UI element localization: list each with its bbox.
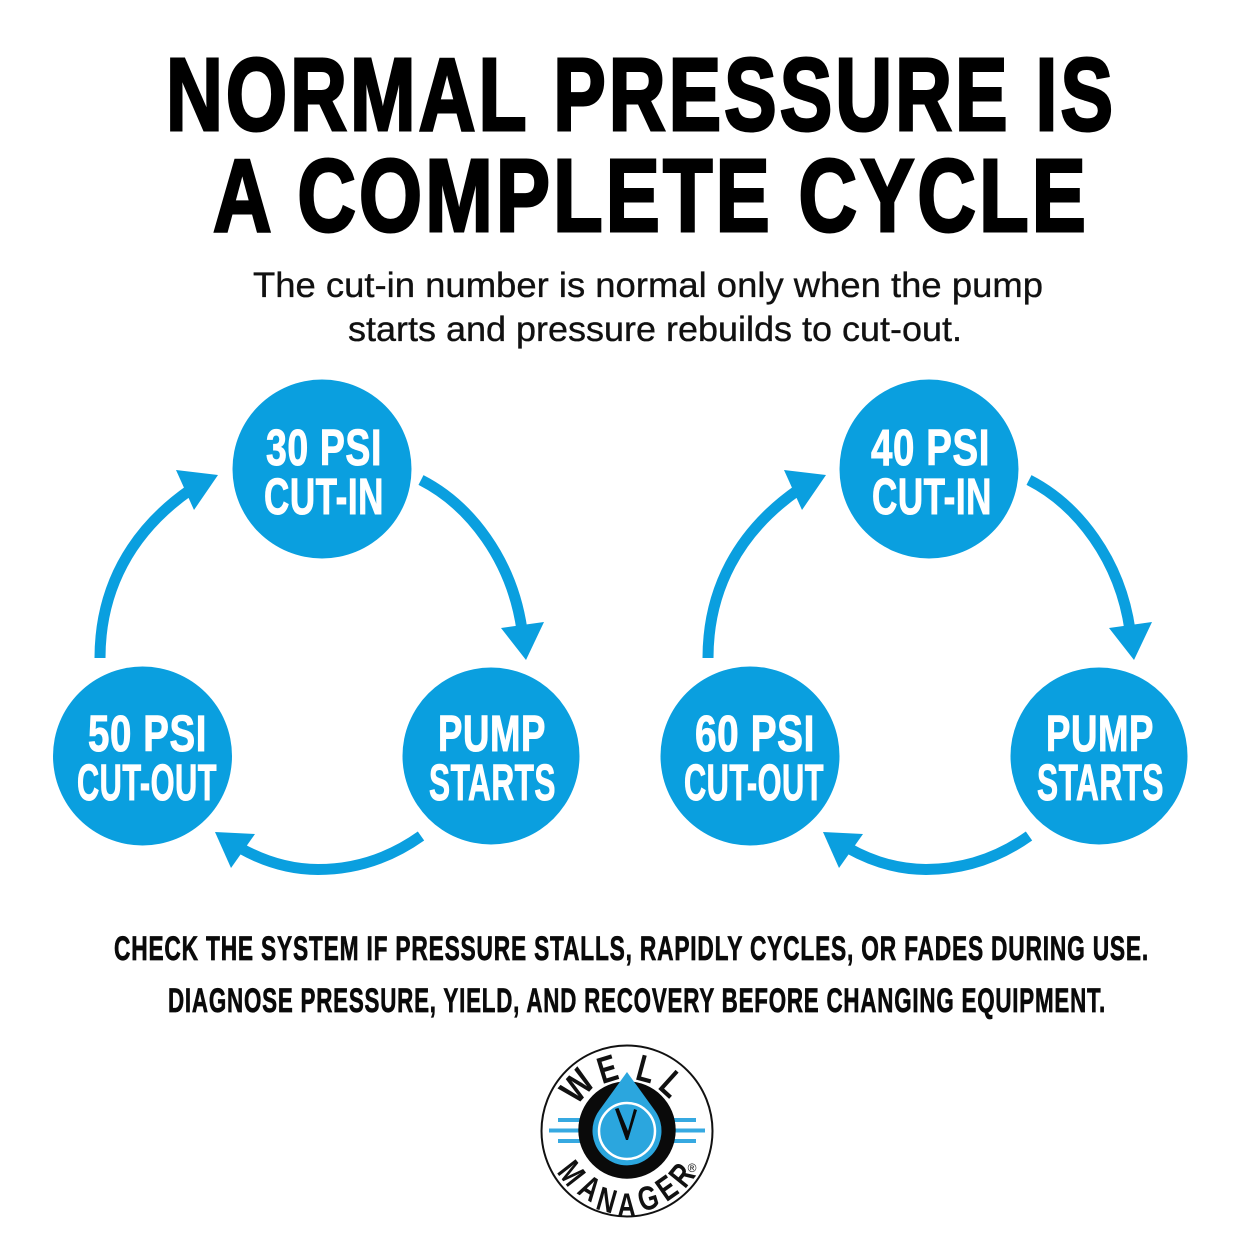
- node: pump starts: STARTS: [429, 754, 556, 811]
- subtitle: [253, 266, 1043, 349]
- logo: Well Manager: N: [592, 1180, 620, 1221]
- logo: Well Manager: W: [552, 1062, 603, 1111]
- arrow: cut-out to cut-in: [100, 470, 218, 658]
- logo: Well Manager: ®: [688, 1161, 697, 1175]
- logo: Well Manager: L: [651, 1063, 692, 1106]
- logo: Well Manager: R: [662, 1156, 703, 1194]
- logo: Well Manager: G: [633, 1178, 663, 1220]
- arrow: cut-in to pump starts: [1029, 480, 1152, 660]
- node: 30 PSI cut-in: [232, 380, 412, 558]
- logo: Well Manager: L: [632, 1048, 660, 1092]
- node: 50 PSI cut-out: CUT-OUT: [77, 754, 217, 811]
- logo: Well Manager: A: [617, 1187, 636, 1225]
- node: 40 PSI cut-in: 40 PSI: [871, 419, 990, 476]
- node: 30 PSI cut-in: CUT-IN: [264, 468, 384, 525]
- logo: Well Manager: M: [550, 1154, 592, 1193]
- node: 50 PSI cut-out: [53, 666, 232, 846]
- node: pump starts: [1010, 668, 1188, 844]
- node: 40 PSI cut-in: [840, 380, 1018, 558]
- node: 60 PSI cut-out: CUT-OUT: [684, 754, 824, 811]
- node: 40 PSI cut-in: CUT-IN: [872, 468, 992, 525]
- arrow: cut-out to cut-in: [708, 470, 826, 658]
- arrow: pump starts to cut-out: [823, 832, 1029, 870]
- logo: Well Manager: E: [593, 1047, 623, 1093]
- node: 50 PSI cut-out: 50 PSI: [88, 705, 207, 762]
- logo: Well Manager: [542, 1046, 712, 1225]
- panel: 40 to 60 PSI cycle: [660, 380, 1188, 870]
- node: pump starts: PUMP: [1046, 705, 1154, 762]
- arrow: pump starts to cut-out: [215, 832, 421, 870]
- node: 30 PSI cut-in: 30 PSI: [266, 419, 382, 476]
- node: pump starts: PUMP: [438, 705, 546, 762]
- footer text: [114, 930, 1149, 1020]
- logo: Well Manager: E: [650, 1169, 685, 1209]
- subtitle: starts and pressure rebuilds to cut-out.: [348, 310, 962, 349]
- subtitle: The cut-in number is normal only when the pump: [253, 266, 1043, 305]
- node: 60 PSI cut-out: [660, 666, 840, 846]
- node: pump starts: STARTS: [1037, 754, 1164, 811]
- node: 60 PSI cut-out: 60 PSI: [695, 705, 815, 762]
- panel: 30 to 50 PSI cycle: [53, 380, 580, 870]
- arrow: cut-in to pump starts: [421, 480, 544, 660]
- logo: Well Manager: A: [572, 1168, 607, 1209]
- node: pump starts: [402, 668, 580, 844]
- title: [166, 37, 1116, 253]
